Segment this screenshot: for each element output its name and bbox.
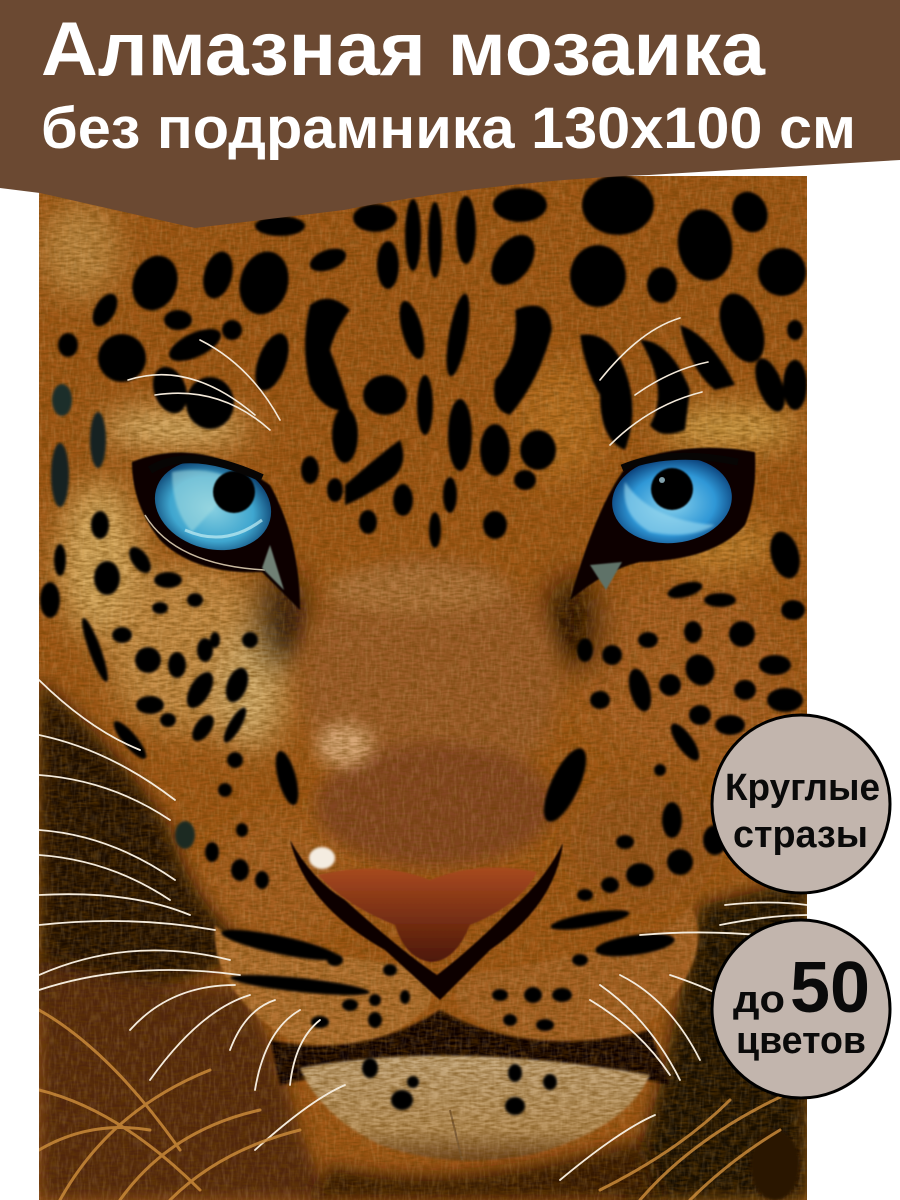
nose bridge — [294, 556, 569, 760]
left eye — [132, 447, 300, 610]
fur colour regions — [40, 200, 800, 940]
badge: up to 50 colours — [712, 920, 890, 1098]
badge: up to 50 colours: цветов — [736, 1020, 866, 1062]
forehead whiskers — [128, 318, 708, 445]
subtitle: без подрамника 130х100 см — [41, 96, 856, 161]
dark corner fill lower right — [620, 880, 807, 1200]
chin — [300, 1056, 650, 1161]
leopard spots — [40, 175, 807, 1200]
fur highlight overlay — [39, 176, 807, 1200]
dark flank left — [39, 680, 250, 1010]
right eye — [570, 448, 755, 600]
lower lip shadow — [270, 1010, 670, 1085]
straw bottom left — [39, 960, 330, 1200]
badge: round rhinestones: Круглые — [725, 767, 880, 809]
badge: up to 50 colours: 50 — [790, 948, 870, 1028]
badge: round rhinestones: стразы — [733, 814, 868, 856]
leopard portrait photo — [39, 175, 807, 1200]
title: Алмазная мозаика — [41, 7, 766, 92]
muzzle pads — [215, 925, 432, 1046]
nose — [290, 840, 563, 1000]
badge: up to 50 colours: до — [733, 979, 785, 1021]
fur texture overlay — [39, 176, 807, 1200]
badge: round rhinestones — [712, 715, 890, 893]
cheek whiskers and straw — [39, 680, 807, 1180]
header banner — [0, 0, 900, 228]
